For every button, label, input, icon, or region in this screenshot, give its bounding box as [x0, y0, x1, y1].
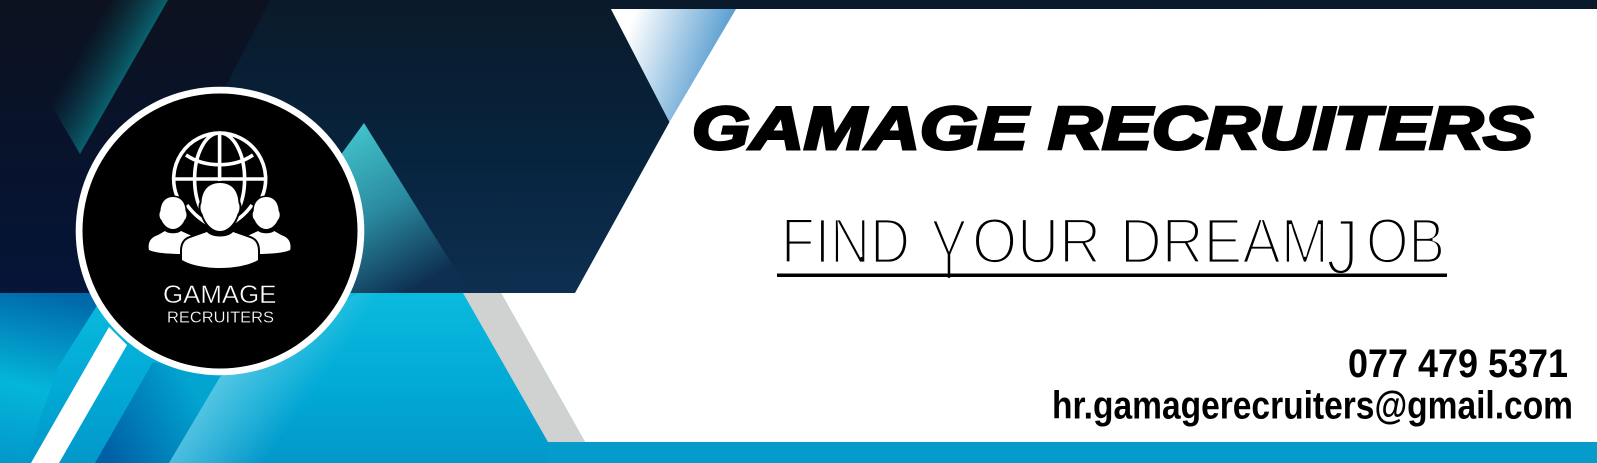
tagline: DREAM: [1120, 205, 1329, 277]
tagline: [781, 200, 1445, 299]
tagline: J: [1326, 202, 1359, 291]
tagline: FIND: [781, 205, 910, 277]
icon: globe: [174, 133, 266, 225]
white content panel: [501, 9, 1597, 442]
background: cyan lower area: [0, 293, 600, 463]
tagline: OB: [1366, 205, 1445, 277]
grey diagonal strip: [463, 293, 585, 442]
teal triangle: [240, 123, 470, 293]
logo text: GAMAGE: [163, 281, 276, 309]
corner gradient triangle: [611, 9, 736, 122]
tagline: Y: [930, 200, 968, 299]
icon: people: [149, 183, 291, 268]
tagline: OUR: [972, 205, 1101, 277]
title: GAMAGE RECRUITERS: [692, 95, 1533, 162]
bottom blue bar: [548, 442, 1597, 463]
logo text: [163, 281, 276, 326]
background: navy band: [0, 0, 1597, 294]
logo badge: [76, 87, 364, 375]
logo text: RECRUITERS: [167, 310, 274, 326]
phone number: 077 479 5371: [1348, 342, 1568, 386]
tagline underline: [777, 274, 1447, 277]
